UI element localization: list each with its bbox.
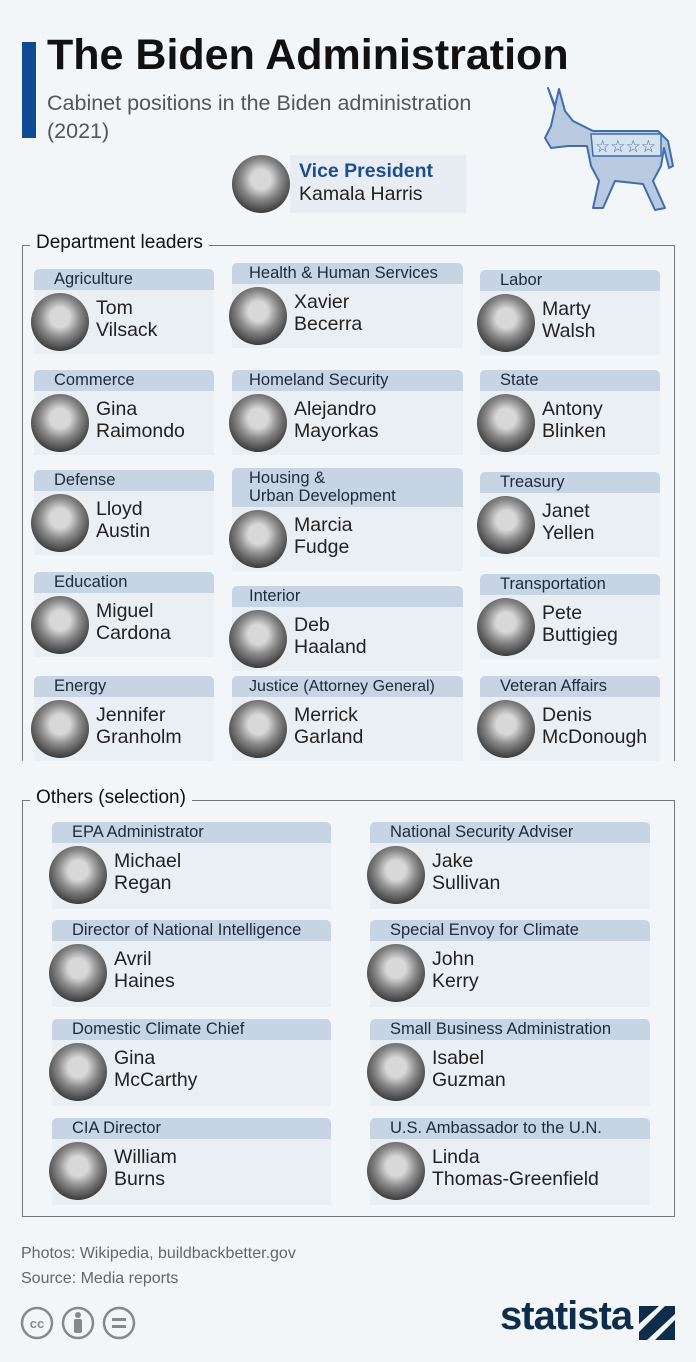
card: CIA — [49, 1118, 331, 1205]
card: Agriculture — [31, 269, 214, 354]
card: DNI — [49, 920, 331, 1007]
card: Health & Human Services: Health & Human Services — [249, 264, 438, 282]
source text: Source: Media reports — [21, 1270, 178, 1287]
card: Homeland Security: Homeland Security — [249, 371, 388, 389]
card: Homeland Security — [229, 370, 463, 455]
card: Health & Human Services: Becerra — [294, 313, 362, 335]
card: Housing: Marcia — [294, 514, 353, 536]
card: Defense: Austin — [96, 520, 150, 542]
panel: department leaders — [22, 232, 675, 761]
card: NSA: Sullivan — [432, 872, 500, 894]
card: Energy: Energy — [54, 677, 106, 695]
card: Treasury: Yellen — [542, 522, 594, 544]
card: Domestic Climate: Gina — [114, 1047, 155, 1069]
card: Commerce: Gina — [96, 398, 137, 420]
card: SBA — [367, 1019, 650, 1106]
card: Housing: Urban Development — [249, 487, 396, 505]
panel: others: Others (selection) — [36, 787, 186, 808]
card: NSA — [367, 822, 650, 909]
icon: democratic donkey — [544, 87, 674, 211]
title bar accent — [22, 42, 36, 138]
card: Interior — [229, 586, 463, 671]
card: Homeland Security: Alejandro — [294, 398, 376, 420]
card: CIA: Burns — [114, 1168, 165, 1190]
card: Commerce: Raimondo — [96, 420, 185, 442]
card: Housing — [229, 468, 463, 571]
card: UN ambassador: U.S. Ambassador to the U.N. — [390, 1119, 602, 1137]
card: DNI: Director of National Intelligence — [72, 921, 301, 939]
card: Interior: Deb — [294, 614, 330, 636]
card: Education: Cardona — [96, 622, 171, 644]
card: Labor: Walsh — [542, 320, 595, 342]
card: Defense: Defense — [54, 471, 115, 489]
card: UN ambassador: Thomas-Greenfield — [432, 1168, 599, 1190]
card: Labor — [477, 270, 660, 355]
card: UN ambassador: Linda — [432, 1146, 480, 1168]
card: Treasury: Janet — [542, 500, 590, 522]
card: Transportation — [477, 574, 660, 659]
card: Domestic Climate — [49, 1019, 331, 1106]
card: DNI: Avril — [114, 948, 152, 970]
card: Climate envoy: Special Envoy for Climate — [390, 921, 579, 939]
card: Defense — [31, 470, 214, 555]
card: Commerce — [31, 370, 214, 455]
card: DNI: Haines — [114, 970, 175, 992]
statista logo: statista — [500, 1294, 632, 1338]
card: Transportation: Transportation — [500, 575, 606, 593]
card: Housing: Housing & — [249, 469, 325, 487]
panel: department leaders: Department leaders — [36, 232, 203, 253]
card: Treasury — [477, 472, 660, 557]
source text: Photos: Wikipedia, buildbackbetter.gov — [21, 1245, 296, 1262]
card: State — [477, 370, 660, 455]
card: Veteran Affairs: McDonough — [542, 726, 647, 748]
card: Housing: Fudge — [294, 536, 349, 558]
card: Education: Education — [54, 573, 127, 591]
card: Labor: Marty — [542, 298, 591, 320]
source text — [21, 1245, 296, 1287]
title: The Biden Administration — [47, 31, 569, 79]
card: State: Antony — [542, 398, 603, 420]
vice president card: Vice President — [299, 160, 433, 182]
subtitle — [47, 91, 471, 143]
card: Justice: Justice (Attorney General) — [249, 678, 435, 695]
card: Transportation: Buttigieg — [542, 624, 618, 646]
card: EPA: EPA Administrator — [72, 823, 204, 841]
card: Labor: Labor — [500, 271, 542, 289]
card: EPA: Michael — [114, 850, 181, 872]
card: Climate envoy: Kerry — [432, 970, 479, 992]
card: State: State — [500, 371, 539, 389]
subtitle: (2021) — [47, 119, 109, 143]
card: Education — [31, 572, 214, 657]
card: Energy: Jennifer — [96, 704, 165, 726]
card: UN ambassador — [367, 1118, 650, 1205]
card: Justice — [229, 676, 463, 761]
icon: creative commons: cc — [30, 1316, 44, 1331]
card: Climate envoy — [367, 920, 650, 1007]
card: Commerce: Commerce — [54, 371, 135, 389]
card: Domestic Climate: McCarthy — [114, 1069, 197, 1091]
card: Agriculture: Vilsack — [96, 319, 157, 341]
card: Defense: Lloyd — [96, 498, 143, 520]
panel: others — [22, 787, 675, 1217]
card: Veteran Affairs — [477, 676, 660, 761]
card: Veteran Affairs: Veteran Affairs — [500, 677, 607, 695]
card: Energy — [31, 676, 214, 761]
card: Health & Human Services: Xavier — [294, 291, 349, 313]
card: Domestic Climate: Domestic Climate Chief — [72, 1020, 244, 1038]
card: NSA: Jake — [432, 850, 473, 872]
vice president card — [232, 155, 466, 213]
icon: democratic donkey: ☆☆☆☆ — [595, 137, 656, 157]
card: Education: Miguel — [96, 600, 153, 622]
card: Justice: Merrick — [294, 704, 358, 726]
card: Agriculture: Tom — [96, 297, 133, 319]
card: CIA: CIA Director — [72, 1119, 161, 1137]
card: Treasury: Treasury — [500, 473, 564, 491]
card: Climate envoy: John — [432, 948, 474, 970]
card: Energy: Granholm — [96, 726, 182, 748]
card: Veteran Affairs: Denis — [542, 704, 592, 726]
card: Health & Human Services — [229, 263, 463, 348]
vice president card: Kamala Harris — [299, 183, 423, 205]
card: EPA: Regan — [114, 872, 171, 894]
card: SBA: Small Business Administration — [390, 1020, 611, 1038]
card: Interior: Haaland — [294, 636, 367, 658]
card: CIA: William — [114, 1146, 177, 1168]
card: Homeland Security: Mayorkas — [294, 420, 379, 442]
card: SBA: Isabel — [432, 1047, 484, 1069]
card: Agriculture: Agriculture — [54, 270, 133, 288]
icon: creative commons — [20, 1306, 136, 1340]
card: NSA: National Security Adviser — [390, 823, 573, 841]
card: Interior: Interior — [249, 587, 300, 605]
card: Justice: Garland — [294, 726, 363, 748]
card: SBA: Guzman — [432, 1069, 506, 1091]
card: EPA — [49, 822, 331, 909]
card: Transportation: Pete — [542, 602, 582, 624]
card: State: Blinken — [542, 420, 606, 442]
subtitle: Cabinet positions in the Biden administration — [47, 91, 471, 115]
